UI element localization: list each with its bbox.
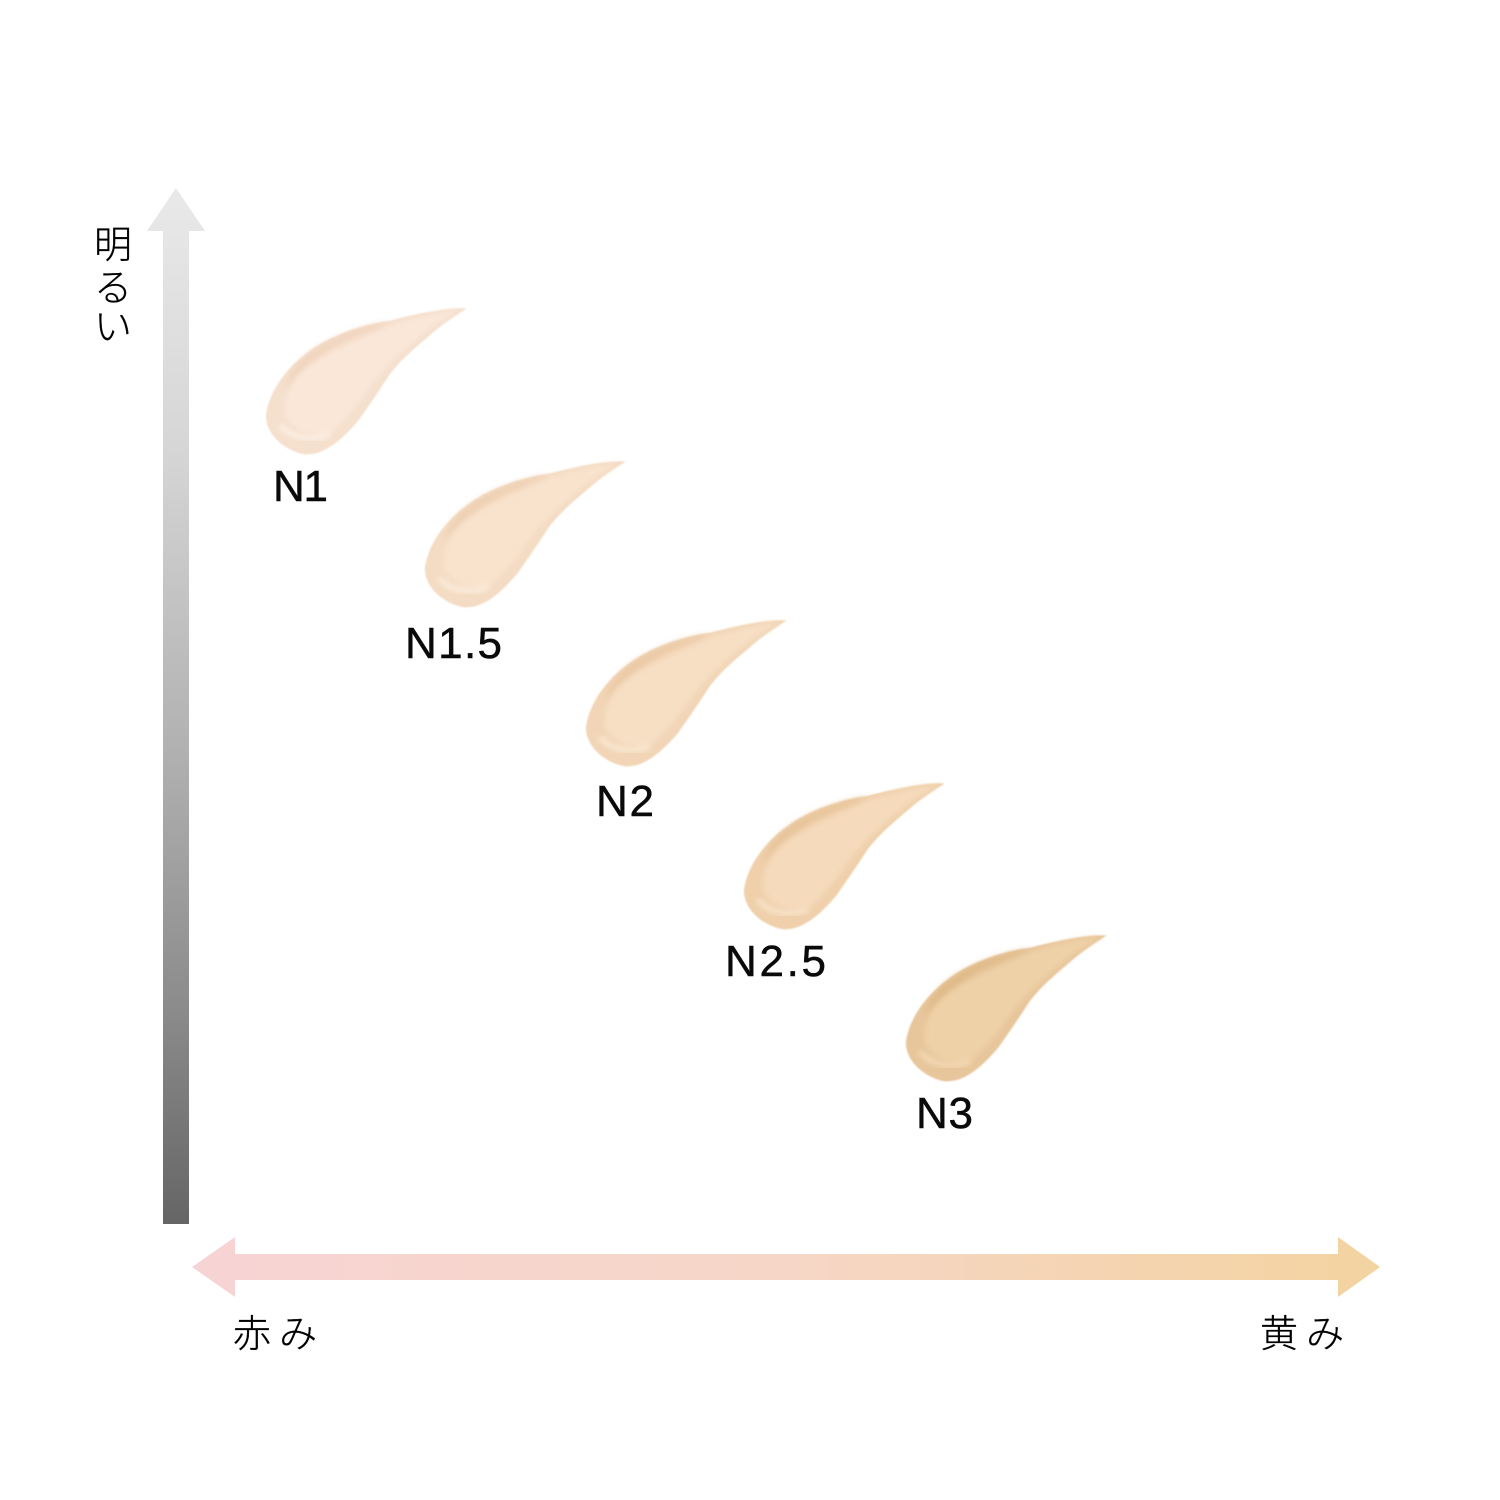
label: N2: N2 bbox=[596, 777, 654, 826]
axis label: 明るい bbox=[94, 225, 132, 349]
swatch: N1.5 bbox=[425, 461, 626, 607]
label: N2.5: N2.5 bbox=[725, 937, 826, 986]
swatch: N2 bbox=[586, 620, 787, 766]
axis label: 黄み: 黄み bbox=[1260, 1314, 1352, 1356]
axis label: 明るい: る bbox=[94, 268, 132, 310]
horizontal axis arrow: red to yellow bbox=[192, 1237, 1380, 1297]
axis label: 赤み: 赤み bbox=[233, 1314, 325, 1356]
axis label: 明るい: 明 bbox=[94, 225, 132, 267]
vertical axis arrow: brightness bbox=[147, 188, 205, 1224]
label: N1: N1 bbox=[273, 462, 328, 511]
label: N3: N3 bbox=[916, 1089, 973, 1138]
label: N1.5: N1.5 bbox=[405, 619, 502, 668]
swatch: N1 bbox=[266, 308, 467, 454]
swatch: N2.5 bbox=[744, 783, 945, 929]
swatch: N3 bbox=[906, 935, 1107, 1081]
axis label: 明るい: い bbox=[94, 307, 132, 349]
